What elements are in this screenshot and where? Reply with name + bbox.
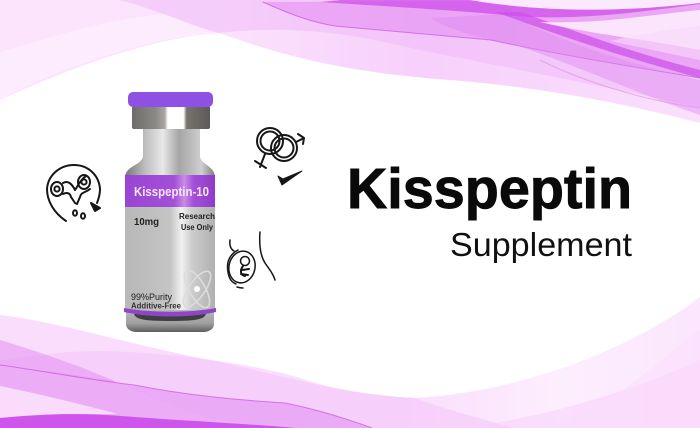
vial purity: 99%Purity [131, 292, 172, 303]
title: Kisspeptin [347, 157, 632, 221]
top wave ribbons [0, 0, 700, 123]
vial metal ring [132, 106, 210, 129]
vial [124, 92, 216, 332]
vial base shadow [134, 314, 206, 321]
vial glass neck and shoulder [125, 128, 215, 178]
vial base [126, 310, 214, 332]
icon: uterus cycle [47, 165, 100, 221]
icon: pregnancy [226, 232, 275, 288]
bottom wave ribbons [0, 297, 700, 428]
vial label name: Kisspeptin-10 [134, 184, 209, 199]
atom watermark [178, 267, 216, 311]
vial body [125, 206, 215, 310]
vial additive: Additive-Free [131, 302, 182, 310]
vial purple cap [128, 92, 213, 107]
subtitle: Supplement [450, 226, 632, 263]
vial purple band [125, 175, 215, 207]
vial research note: Research [179, 212, 215, 221]
icon: gender symbols with check [255, 128, 304, 185]
vial dose: 10mg [134, 217, 159, 228]
vial lower stripe [124, 308, 216, 316]
vial research note: Use Only [181, 223, 214, 232]
